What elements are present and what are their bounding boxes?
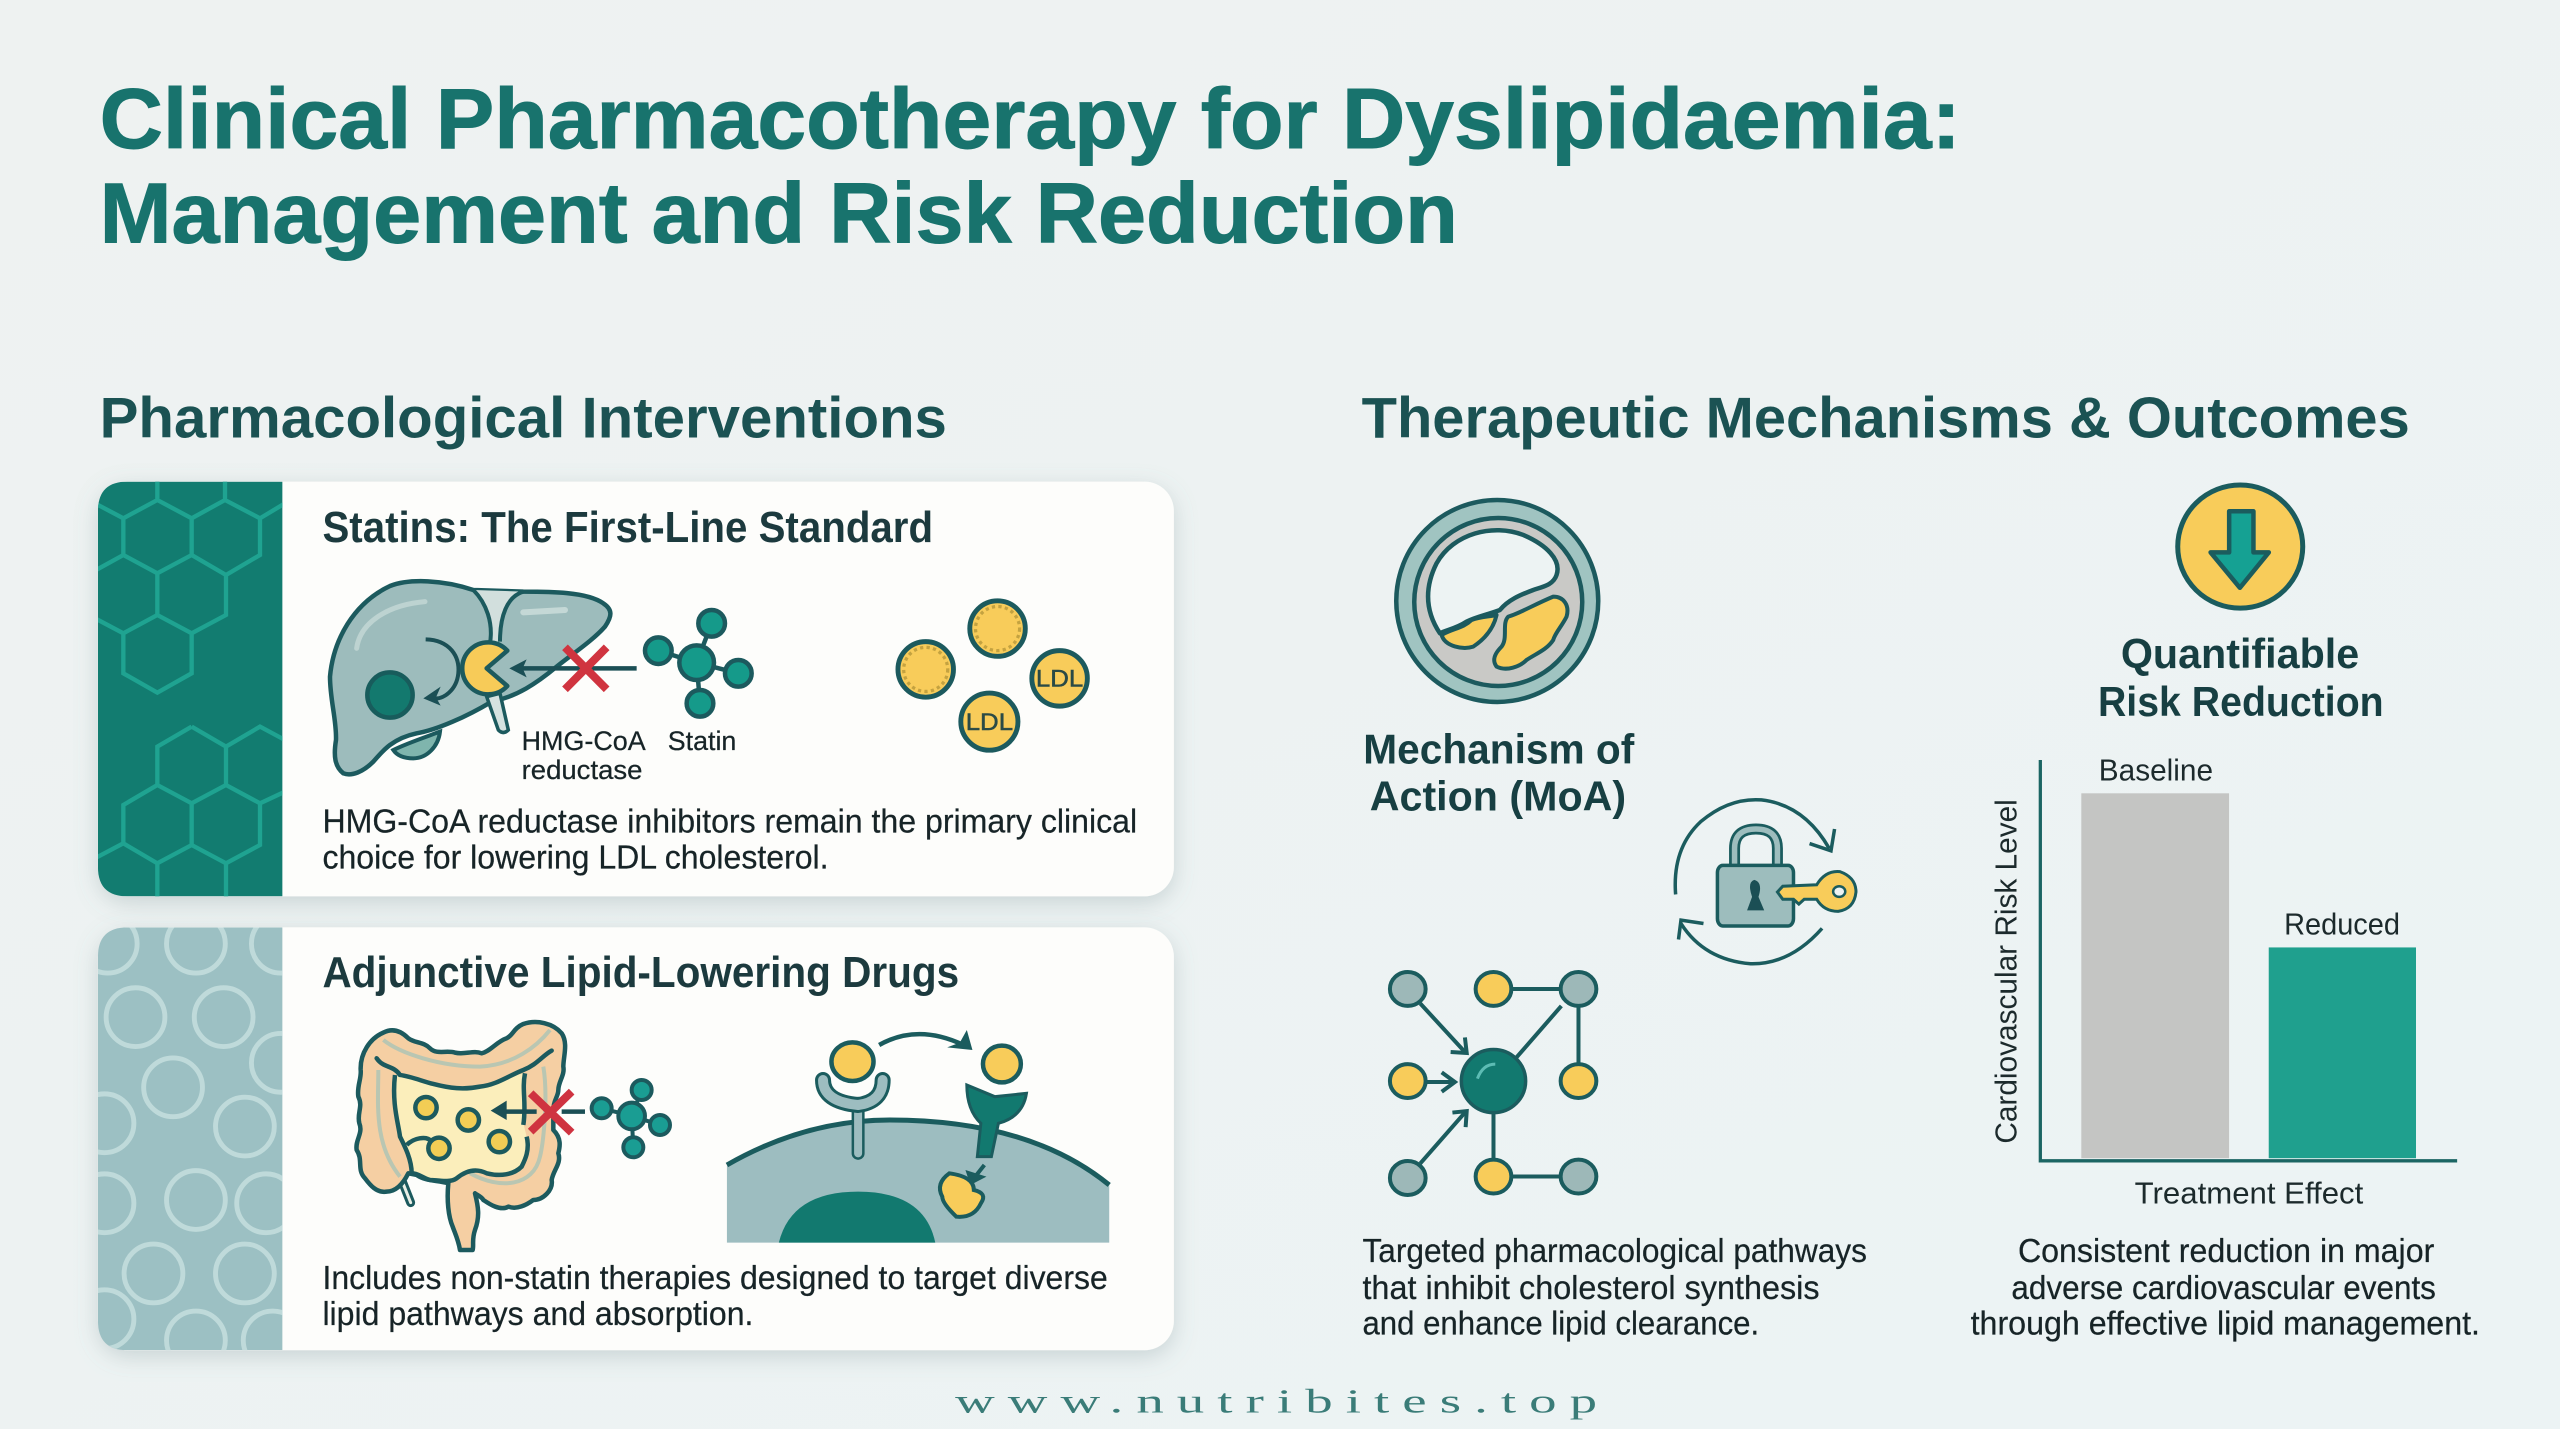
icon: artery with plaque <box>1396 500 1598 702</box>
bar: baseline <box>2081 793 2229 1158</box>
text: mechanism description: Targeted pharmacological pathways <box>1362 1233 1867 1270</box>
card title: Adjunctive Lipid-Lowering Drugs <box>322 949 959 997</box>
heading: therapeutic mechanisms and outcomes: Therapeutic Mechanisms & Outcomes <box>1362 387 2410 451</box>
label: HMG-CoA reductase <box>522 726 646 785</box>
label: HMG-CoA reductase: HMG-CoA <box>522 726 646 756</box>
label: HMG-CoA reductase: reductase <box>522 755 642 785</box>
icon: LDL particles: LDL <box>966 710 1013 736</box>
heading: mechanism of action: Mechanism of <box>1363 725 1634 772</box>
text: outcome description <box>1971 1233 2480 1343</box>
hexagon pattern strip <box>95 480 285 900</box>
text: outcome description: Consistent reduction in major <box>2018 1233 2434 1270</box>
axis label: treatment effect: Treatment Effect <box>2135 1177 2364 1210</box>
panel: statins <box>95 480 1174 900</box>
heading: pharmacological interventions: Pharmacological Interventions <box>100 387 947 451</box>
icon: pathway network <box>1390 972 1596 1195</box>
title: Management and Risk Reduction <box>100 166 1458 262</box>
label: statin: Statin <box>668 726 736 756</box>
label: baseline: Baseline <box>2099 754 2213 787</box>
card title: Statins: The First-Line Standard <box>322 504 933 552</box>
circle pattern strip <box>98 928 282 1350</box>
label: reduced: Reduced <box>2284 909 2400 942</box>
text: mechanism description <box>1362 1233 1867 1343</box>
card body text: HMG-CoA reductase inhibitors remain the primary clinical <box>322 804 1137 841</box>
text: mechanism description: that inhibit cholesterol synthesis <box>1362 1270 1820 1307</box>
heading: quantifiable risk reduction: Quantifiable <box>2121 630 2359 677</box>
illustration: cell receptor uptake <box>727 1030 1109 1243</box>
footer url: www.nutribites.top <box>955 1382 1610 1420</box>
illustration: liver with HMG-CoA reductase blocked by statin <box>330 581 752 774</box>
axis label: cardiovascular risk level: Cardiovascular Risk Level <box>1990 799 2023 1144</box>
text: outcome description: adverse cardiovascular events <box>2011 1270 2436 1307</box>
bar chart: cardiovascular risk <box>1990 754 2457 1210</box>
title <box>100 71 1961 262</box>
text: mechanism description: and enhance lipid clearance. <box>1362 1306 1759 1343</box>
icon: lock and key with cycle arrows <box>1675 800 1856 964</box>
card body text: lipid pathways and absorption. <box>322 1296 753 1333</box>
heading: mechanism of action: Action (MoA) <box>1370 773 1626 820</box>
chart axes <box>2040 760 2457 1161</box>
text: outcome description: through effective lipid management. <box>1971 1306 2480 1343</box>
bar: reduced <box>2269 947 2416 1158</box>
icon: down arrow in circle <box>2178 485 2303 608</box>
panel: adjunctive drugs <box>75 914 1174 1370</box>
heading: mechanism of action <box>1363 725 1634 820</box>
illustration: intestine with absorption blocked <box>356 1022 670 1250</box>
icon: LDL particles: LDL <box>1036 667 1083 693</box>
heading: quantifiable risk reduction <box>2098 630 2384 725</box>
card body text: choice for lowering LDL cholesterol. <box>322 840 829 877</box>
icon: LDL particles <box>898 601 1087 750</box>
card body text <box>322 1260 1108 1333</box>
title: Clinical Pharmacotherapy for Dyslipidaemia: <box>100 71 1961 167</box>
card body text: Includes non-statin therapies designed to target diverse <box>322 1260 1108 1297</box>
heading: quantifiable risk reduction: Risk Reduction <box>2098 678 2384 725</box>
card body text <box>322 804 1137 877</box>
